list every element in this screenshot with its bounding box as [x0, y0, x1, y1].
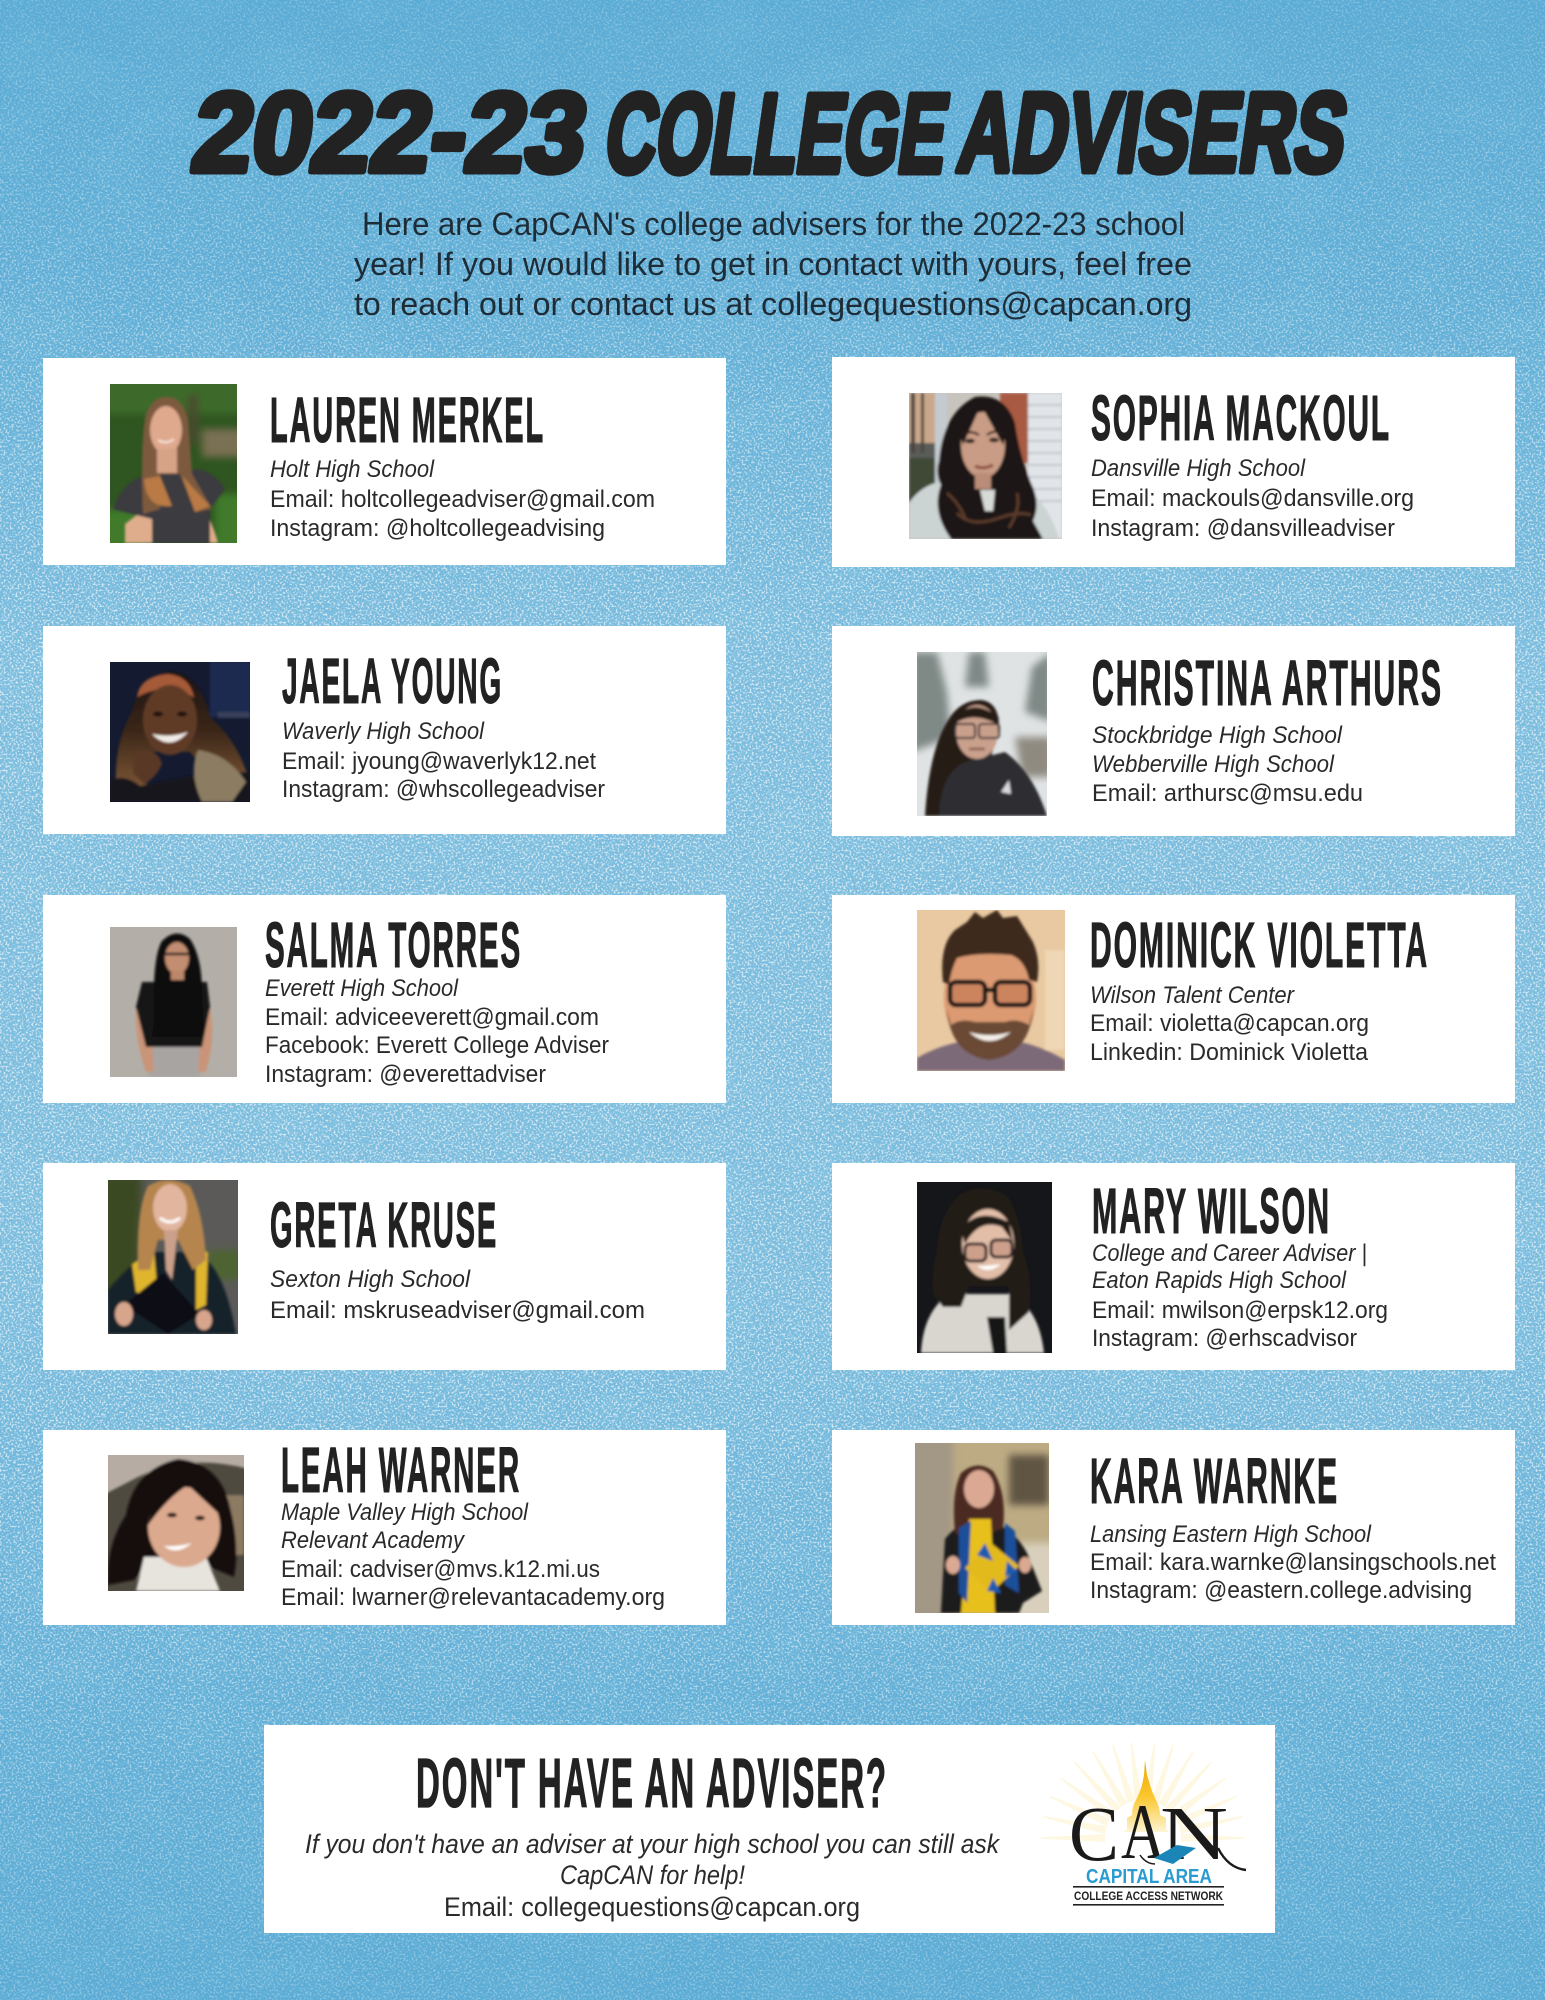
- details: Wilson Talent Center: [1090, 982, 1295, 1009]
- panel: Mary Wilson: [832, 1163, 1515, 1370]
- panel: Lauren Merkel: LAUREN MERKEL: [270, 384, 545, 456]
- title: 2022-23: [186, 69, 595, 195]
- panel: don't have an adviser: [264, 1725, 1275, 1933]
- details: [1092, 722, 1363, 807]
- photo: Jaela Young: [110, 662, 250, 802]
- panel: Sophia Mackoul: [832, 357, 1515, 567]
- details: Instagram: @dansvilleadviser: [1091, 515, 1395, 542]
- details: Email: jyoung@waverlyk12.net: [282, 748, 596, 775]
- logo: Capital Area College Access Network: A: [1121, 1788, 1165, 1875]
- details: Email: mwilson@erpsk12.org: [1092, 1297, 1388, 1324]
- details: Waverly High School: [282, 718, 485, 745]
- details: Email: arthursc@msu.edu: [1092, 780, 1363, 807]
- details: [270, 1266, 645, 1324]
- title: [186, 69, 1355, 196]
- photo: Dominick Violetta: [917, 910, 1065, 1071]
- photo: Greta Kruse: [108, 1180, 238, 1334]
- logo: Capital Area College Access Network: CAPITAL AREA: [1086, 1866, 1212, 1888]
- logo: Capital Area College Access Network: COLLEGE ACCESS NETWORK: [1074, 1891, 1224, 1903]
- details: Holt High School: [270, 456, 435, 483]
- details: Instagram: @erhscadvisor: [1092, 1325, 1357, 1352]
- panel: Greta Kruse: [43, 1163, 726, 1370]
- photo: Salma Torres: [110, 927, 237, 1077]
- details: Email: adviceeverett@gmail.com: [265, 1004, 599, 1031]
- help text: Email: collegequestions@capcan.org: [444, 1892, 860, 1922]
- details: Eaton Rapids High School: [1092, 1267, 1347, 1294]
- intro text: to reach out or contact us at collegequestions@capcan.org: [354, 286, 1192, 322]
- photo: Lauren Merkel: [110, 384, 237, 543]
- panel: Jaela Young: JAELA YOUNG: [282, 645, 503, 717]
- details: [1092, 1240, 1388, 1352]
- logo: Capital Area College Access Network: [1041, 1742, 1246, 1906]
- panel: Jaela Young: [43, 626, 726, 834]
- details: Stockbridge High School: [1092, 722, 1343, 749]
- details: Email: violetta@capcan.org: [1090, 1010, 1369, 1037]
- details: [282, 718, 605, 803]
- details: Email: cadviser@mvs.k12.mi.us: [281, 1556, 600, 1583]
- details: Email: mskruseadviser@gmail.com: [270, 1297, 645, 1324]
- details: Email: mackouls@dansville.org: [1091, 485, 1414, 512]
- details: [1090, 982, 1369, 1066]
- details: Linkedin: Dominick Violetta: [1090, 1039, 1369, 1066]
- photo: Kara Warnke: [915, 1443, 1049, 1613]
- panel: Dominick Violetta: [832, 895, 1515, 1103]
- intro text: year! If you would like to get in contact with yours, feel free: [354, 246, 1192, 282]
- details: Instagram: @eastern.college.advising: [1090, 1577, 1472, 1604]
- panel: Leah Warner: [43, 1430, 726, 1625]
- panel: don't have an adviser: DON'T HAVE AN ADVISER?: [416, 1744, 888, 1822]
- details: Email: holtcollegeadviser@gmail.com: [270, 486, 655, 513]
- details: Webberville High School: [1092, 751, 1335, 778]
- logo: Capital Area College Access Network: N: [1160, 1792, 1228, 1876]
- help text: CapCAN for help!: [560, 1860, 745, 1890]
- panel: Salma Torres: SALMA TORRES: [265, 909, 522, 981]
- details: Lansing Eastern High School: [1090, 1521, 1372, 1548]
- details: Sexton High School: [270, 1266, 471, 1293]
- panel: Leah Warner: LEAH WARNER: [281, 1434, 521, 1506]
- details: Relevant Academy: [281, 1527, 466, 1554]
- intro text: [354, 206, 1192, 322]
- panel: Kara Warnke: [832, 1430, 1515, 1625]
- details: [1091, 455, 1414, 542]
- logo: Capital Area College Access Network: C: [1069, 1790, 1119, 1877]
- details: [265, 975, 609, 1088]
- photo: Leah Warner: [108, 1455, 244, 1591]
- details: College and Career Adviser |: [1092, 1240, 1367, 1267]
- details: Instagram: @everettadviser: [265, 1061, 546, 1088]
- photo: Christina Arthurs: [917, 652, 1047, 816]
- details: Everett High School: [265, 975, 459, 1002]
- panel: Christina Arthurs: [832, 626, 1515, 836]
- photo: Sophia Mackoul: [909, 393, 1062, 539]
- details: Email: lwarner@relevantacademy.org: [281, 1584, 665, 1611]
- title: COLLEGE: [599, 70, 956, 196]
- panel: Greta Kruse: GRETA KRUSE: [270, 1189, 498, 1261]
- help text: [305, 1829, 1000, 1922]
- details: Instagram: @holtcollegeadvising: [270, 515, 605, 542]
- panel: Lauren Merkel: [43, 358, 726, 565]
- details: [281, 1499, 665, 1611]
- details: Dansville High School: [1091, 455, 1306, 482]
- details: Instagram: @whscollegeadviser: [282, 776, 605, 803]
- details: Maple Valley High School: [281, 1499, 529, 1526]
- help text: If you don't have an adviser at your high school you can still ask: [305, 1829, 1000, 1859]
- panel: Salma Torres: [43, 895, 726, 1103]
- details: [1090, 1521, 1496, 1604]
- details: Email: kara.warnke@lansingschools.net: [1090, 1549, 1496, 1576]
- intro text: Here are CapCAN's college advisers for the 2022-23 school: [362, 206, 1185, 242]
- details: [270, 456, 655, 542]
- photo: Mary Wilson: [917, 1182, 1052, 1353]
- details: Facebook: Everett College Adviser: [265, 1032, 609, 1059]
- title: ADVISERS: [952, 69, 1355, 195]
